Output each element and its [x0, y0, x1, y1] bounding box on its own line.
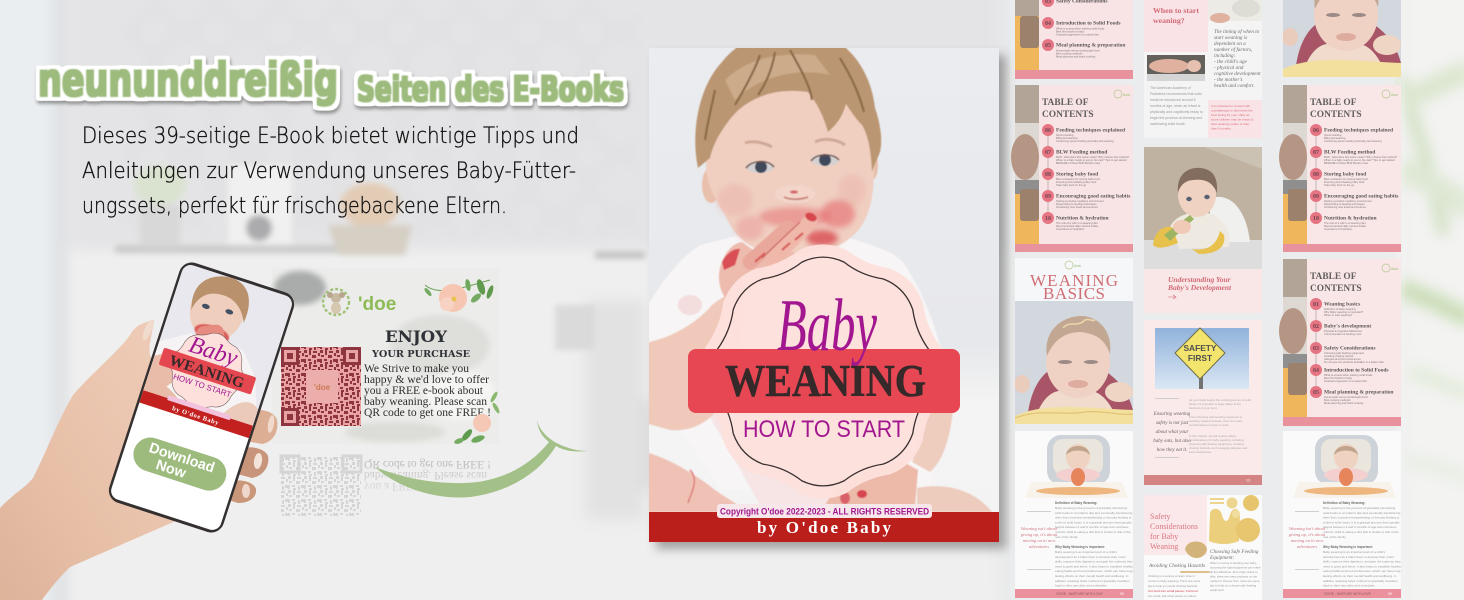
- page: spaghetti baby feeding notes: moving on to new: [1023, 538, 1056, 543]
- page: table of contents 01-05: doe: [1391, 266, 1399, 271]
- page: when to start weaning: The American Academy of: [1150, 86, 1191, 90]
- page: when to start weaning: a pediatrician to determine the: [1211, 108, 1253, 112]
- page: baby feeding notes right column: them from exclusive breastfeeding or formula feeding to: [1323, 516, 1400, 520]
- page: table of contents 06-10 right column: Encouraging good eating habits: [1324, 194, 1398, 200]
- page: baby feeding notes right column: Baby weaning is the process of gradually introducing: [1323, 506, 1396, 510]
- phone cover badge: Baby: [186, 332, 241, 372]
- page: safety considerations: Safety: [1150, 512, 1170, 521]
- page: safety first: choking hazards, and managing allergies and: [1189, 446, 1248, 450]
- page: spaghetti baby feeding notes: a diet of solid foods. It is a gradual process that typically: [1055, 520, 1132, 524]
- page: table of contents 06-10 right column: Best containers for storing baby food: [1324, 177, 1368, 181]
- page: understanding baby's development: Baby's Development: [1167, 283, 1232, 292]
- floral decoration top: [423, 278, 495, 312]
- page: table of contents 06-10 right column: Take baby food on the go: [1324, 183, 1355, 187]
- page: table of contents 01-05: Do not give the products forbidden in a baby's diet: [1324, 360, 1384, 364]
- page: table of contents 06-10: Nutrition & hydration: [1056, 216, 1109, 222]
- page: table of contents 06-10: 09: [1045, 194, 1051, 200]
- page: table of contents 01-05: 05: [1313, 390, 1319, 396]
- page: spaghetti baby feeding notes: begins between 4 and 6 months of age and continues: [1055, 525, 1129, 529]
- page: table of contents 06-10 right column: Feeding techniques explained: [1324, 128, 1393, 134]
- page: table of contents 06-10 right column: Importance of hydration: [1324, 227, 1353, 231]
- card text: happy & we'd love to offer: [364, 372, 489, 386]
- page: spaghetti baby feeding notes: adventures: [1029, 544, 1049, 549]
- red footer band: [649, 512, 999, 542]
- page: when to start weaning: Pediatrics recommends that solid: [1150, 92, 1202, 96]
- thumbnail pages: [1011, 0, 1401, 600]
- card text: you a FREE e-book about: [364, 383, 484, 397]
- page: table of contents 06-10 right column: BLW Feeding method: [1324, 150, 1375, 156]
- page: table of contents 06-10 right column: [1279, 85, 1401, 252]
- floral decoration bottom: [453, 391, 501, 445]
- page: safety considerations: Considerations: [1150, 522, 1198, 531]
- title: neununddreißig Seiten des E-Books: neununddreißig: [38, 53, 338, 107]
- page: safety considerations: tips to help you choose safe feeding: [1210, 584, 1257, 588]
- page: spaghetti baby feeding notes: lasting effects on their overall health and wellbeing. In: [1055, 574, 1129, 578]
- page: table of contents 06-10 right column: Responding to feeding techniques: [1324, 202, 1365, 206]
- page: spaghetti baby feeding notes: development as it helps them to develop their motor: [1055, 555, 1126, 559]
- page: table of contents 01-05: Meal planning and batch cooking: [1324, 401, 1364, 405]
- page: table of contents 06-10 right column: 07: [1313, 150, 1319, 156]
- page: safety considerations: Choking is a serious concern when it: [1148, 574, 1195, 578]
- page: table of contents 06-10: Introducing new foods and textures: [1056, 205, 1098, 209]
- page: table of contents 01-05: Allergies and food intolerances: [1324, 357, 1361, 361]
- page: table of contents 06-10: When is a baby ready to eat on his own? Tips to get started: [1056, 158, 1127, 162]
- reflection of QR card: you a FREE e-book about: [364, 480, 484, 494]
- page: table of contents 01-05: Choosing safe feeding equipment: [1324, 351, 1364, 355]
- page: when to start weaning: - the child's age: [1214, 59, 1248, 65]
- page: safety first: about what your: [1156, 430, 1188, 435]
- page: table of contents 06-10: BLW : what does this name mean? Why choose this method?: [1056, 155, 1130, 159]
- page: safety first: foods, it's important to keep safety at the: [1189, 402, 1241, 406]
- page: table of contents 06-10: Feeding techniques explained: [1056, 128, 1125, 134]
- page: spaghetti baby feeding notes: skills, improve their digestion, and gain the nutrients they: [1055, 560, 1133, 564]
- page: weaning basics: WEANING: [1030, 271, 1118, 290]
- page: when to start weaning: foods be introduced around 6: [1150, 98, 1196, 102]
- page: table of contents 01-05: 04: [1313, 368, 1319, 374]
- page: table of contents 06-10 right column: Nutrition & hydration: [1324, 216, 1377, 222]
- page: when to start weaning: health and comfort.: [1214, 82, 1255, 89]
- page: table of contents 01-05: Communication & feeding cues: [1324, 332, 1362, 336]
- copyright pill: [717, 504, 932, 518]
- title: neununddreißig Seiten des E-Books: [38, 53, 624, 110]
- page: table of contents 01-05: Introduction to Solid Foods: [1324, 368, 1389, 374]
- page: table of contents 01-05: [1279, 259, 1401, 426]
- page: when to start weaning: physically and cognitively ready to: [1150, 110, 1203, 114]
- e-book cover: [645, 42, 999, 542]
- words: HOW TO START: HOW TO START: [743, 416, 905, 443]
- page: understanding baby's development: [1144, 147, 1262, 313]
- description text block: ungssets, perfekt für frischgebackene Eltern.: [82, 194, 507, 219]
- page: table of contents 01-05: 03: [1313, 346, 1319, 352]
- page: when to start weaning: begin the process of chewing and: [1150, 116, 1202, 120]
- page: table of contents 06-10: Storing baby food: [1056, 172, 1098, 178]
- O'doe logo: 'doe: [358, 294, 396, 315]
- page: table of contents 06-10: Take baby food on the go: [1056, 183, 1087, 187]
- QR code: [281, 347, 361, 426]
- page: safety considerations: Weaning: [1150, 542, 1178, 551]
- nose: [784, 194, 809, 200]
- page: table of contents 06-10: Combining spoon feeding and baby-led weaning: [1056, 139, 1114, 143]
- page: baby feeding notes right column: skills, improve their digestion, and gain the nutrients they: [1323, 560, 1401, 564]
- page: baby feeding notes right column: lasting effects on their overall health and wellbeing. In: [1323, 574, 1397, 578]
- script word: Baby: Baby: [777, 285, 877, 367]
- page: table of contents 01-05: 02: [1313, 324, 1319, 330]
- page: table of contents 06-10: doe: [1123, 92, 1131, 97]
- page: table of contents 01-05: Physical & Cognitive Milestones: [1324, 329, 1363, 333]
- page: safety first: baby eats, but also: [1153, 439, 1191, 444]
- page: contents 03-05 cropped: Best first foods for baby: [1056, 30, 1085, 34]
- page: when to start weaning: weaning?: [1153, 16, 1185, 25]
- page: when to start weaning: start weaning earlier or later: [1211, 122, 1249, 126]
- page: table of contents 06-10 right column: The role of a milk in a weaning diet: [1324, 221, 1366, 225]
- page: safety first: SAFETY: [1183, 343, 1217, 353]
- page: safety considerations: Cut food into small pieces: Cut food: [1148, 589, 1198, 593]
- page: when to start weaning: some children may be ready to: [1211, 118, 1254, 122]
- page: baby feeding notes right column: Weaning isn't about: [1289, 526, 1326, 531]
- page: spaghetti baby feeding notes: Baby weaning is the process of gradually introducing: [1055, 506, 1128, 510]
- page: table of contents 06-10: Importance of hydration: [1056, 227, 1085, 231]
- page: safety considerations: equipment:: [1210, 588, 1224, 592]
- page: table of contents 06-10: Spoon feeding: [1056, 133, 1074, 137]
- page: baby feeding notes right column: [1283, 431, 1401, 598]
- red title bar: [688, 349, 960, 413]
- page: spaghetti baby feeding notes: need to grow and thrive. It also helps to establish healthy: [1055, 564, 1133, 568]
- page: when to start weaning: - physical and: [1214, 65, 1244, 71]
- page: when to start weaning: number of factors,: [1214, 46, 1252, 53]
- page: weaning basics: BASICS: [1043, 284, 1105, 303]
- phone cover red band: by O'doe Baby: [171, 405, 220, 427]
- page: spaghetti baby feeding notes: Why Baby Weaning is Important:: [1055, 545, 1105, 549]
- page: safety first: 13: [1246, 478, 1250, 482]
- page: table of contents 01-05: Gradual progression to a varied diet: [1324, 379, 1367, 383]
- page: contents 03-05 cropped: [1015, 0, 1133, 79]
- page: baby feeding notes right column: until the child is eating a diet that is similar to that of the: [1323, 530, 1399, 534]
- page: when to start weaning: - the mother's: [1214, 77, 1242, 83]
- phone cover red band: [139, 387, 254, 438]
- page: safety first: food intolerances.: [1189, 450, 1212, 454]
- page: safety considerations: tips to help you avoid choking hazards:: [1148, 584, 1198, 588]
- page: table of contents 01-05: Baby's development: [1324, 324, 1371, 330]
- page photo: baby with spaghetti: [1014, 301, 1133, 424]
- phone cover badge: WEANING: [167, 353, 246, 392]
- page: baby feeding notes right column: Definition of Baby Weaning:: [1323, 501, 1365, 505]
- page: when to start weaning: [1144, 0, 1262, 138]
- page: baby feeding notes right column: back to their own diets and schedules.: [1323, 584, 1376, 588]
- card text: YOUR PURCHASE: [371, 350, 470, 360]
- page: table of contents 06-10: Responding to feeding techniques: [1056, 202, 1097, 206]
- card text: [364, 327, 491, 419]
- page: safety first: how they eat it.: [1157, 448, 1187, 453]
- page: safety first: considerations to keep in mind.: [1189, 423, 1229, 427]
- page: spaghetti baby feeding notes: solid foods to an infant's diet and eventually transitioning: [1055, 511, 1133, 515]
- page: table of contents 06-10 right column: Spoon feeding: [1324, 133, 1342, 137]
- white haze over thumbnails: [1010, 0, 1405, 600]
- page: baby feeding notes right column: moving on to new: [1291, 538, 1324, 543]
- page: safety considerations: choosing the right equipment can make: [1210, 566, 1261, 570]
- hand holding phone: [0, 318, 277, 600]
- card text: QR code to get one FREE !: [364, 405, 491, 419]
- badge inner wavy line: [712, 257, 934, 486]
- page: table of contents 01-05: 01: [1313, 302, 1319, 308]
- reflection of QR card: QR code to get one FREE !: [364, 458, 491, 472]
- QR code: 'doe: [314, 383, 331, 392]
- page: table of contents 01-05: Safety Considerations: [1324, 346, 1376, 352]
- page: contents 03-05 cropped: 04: [1045, 21, 1051, 27]
- page: table of contents 06-10 right column: Combining spoon feeding and baby-led weaning: [1324, 139, 1382, 143]
- page: table of contents 06-10: 08: [1045, 172, 1051, 178]
- page: safety considerations: Choosing Safe Feeding: [1210, 548, 1259, 555]
- page: safety considerations: market to choose from. Here are some: [1210, 579, 1260, 583]
- page: contents 03-05 cropped: Gradual progression to a varied diet: [1056, 32, 1099, 36]
- page: baby feeding notes right column: giving up, it's about: [1289, 532, 1326, 538]
- page: baby feeding notes right column: addition, weaning helps mothers to gradually transition: [1323, 579, 1398, 583]
- page: table of contents 06-10: [1011, 85, 1133, 252]
- page: table of contents 01-05: What to expect when starting solid foods: [1324, 373, 1373, 377]
- phone cover badge: [149, 319, 266, 423]
- left arm: [649, 296, 726, 431]
- page: safety first: FIRST: [1188, 353, 1213, 363]
- page: weaning basics: doe: [1074, 263, 1082, 268]
- page: safety considerations: comes to baby weaning. There are some: [1148, 579, 1201, 583]
- page: baby feeding notes right column: Why Baby Weaning is Important:: [1323, 545, 1373, 549]
- page: spaghetti baby feeding notes: [1015, 431, 1133, 598]
- page: spaghetti baby feeding notes: until the child is eating a diet that is similar to that of the: [1055, 530, 1131, 534]
- phone cover badge: HOW TO START: [172, 372, 232, 399]
- card text: baby weaning. Please scan: [364, 394, 487, 408]
- page: table of contents 01-05: Homemade versus storebought food: [1324, 395, 1368, 399]
- card text: We Strive to make you: [364, 361, 469, 375]
- page: contents 03-05 cropped: Best cooking methods: [1056, 52, 1083, 56]
- page: spaghetti baby feeding notes: Weaning isn't about: [1021, 526, 1058, 531]
- cover photo: baby: [645, 42, 992, 512]
- page: table of contents 06-10 right column: 09: [1313, 194, 1319, 200]
- page: when to start weaning: It is important to consult with: [1211, 104, 1250, 108]
- page: table of contents 06-10 right column: 06: [1313, 128, 1319, 134]
- hand with fingers: [719, 211, 818, 302]
- page: safety considerations: into small, bite-sized pieces to reduce: [1148, 594, 1197, 598]
- page: table of contents 06-10: Freezing and reheating baby food: [1056, 180, 1097, 184]
- page: when to start weaning: months of age, when an infant is: [1150, 104, 1201, 108]
- author line: by O'doe Baby: [757, 518, 892, 537]
- page: table of contents 01-05: Avoiding choking hazard: [1324, 354, 1354, 358]
- page: when to start weaning: swallowing solid foods.: [1150, 122, 1186, 126]
- page: safety considerations: When it comes to feeding your baby,: [1210, 561, 1257, 565]
- page: safety considerations: for Baby: [1150, 532, 1178, 541]
- page: safety considerations: all the difference. From high chairs to: [1210, 570, 1258, 574]
- page: weaning basics: [1015, 258, 1133, 424]
- page: spaghetti baby feeding notes: 09: [1120, 592, 1124, 596]
- copyright pill: Copyright O'doe 2022-2023 - ALL RIGHTS RESERVED: [720, 506, 929, 516]
- page: when to start weaning: than 6 months.: [1211, 126, 1232, 130]
- eyes: [746, 154, 839, 173]
- scalloped badge: [700, 244, 946, 499]
- page: safety first: [1144, 320, 1262, 485]
- reflection of QR card: baby weaning. Please scan: [364, 469, 487, 483]
- page: baby feeding notes right column: Baby weaning is an important part of a child's: [1323, 550, 1386, 554]
- page: spaghetti baby feeding notes: Definition of Baby Weaning:: [1055, 501, 1097, 505]
- page: table of contents 01-05: Definition of baby weaning: [1324, 307, 1356, 311]
- page: table of contents 06-10 right column: BLW : what does this name mean? Why choose this method?: [1324, 155, 1398, 159]
- page: when to start weaning: The timing of when to: [1214, 28, 1260, 35]
- page: baby feeding notes right column: need to grow and thrive. It also helps to establish healthy: [1323, 564, 1401, 568]
- page: table of contents 06-10: CONTENTS: [1042, 110, 1094, 120]
- page: when to start weaning: including:: [1214, 53, 1236, 59]
- page: table of contents 01-05: CONTENTS: [1310, 284, 1362, 294]
- page: table of contents 06-10: Recommended daily nutrient intake: [1056, 224, 1099, 228]
- page: table of contents 01-05: Best first foods for baby: [1324, 376, 1353, 380]
- page: safety first: choosing safe feeding equipment, avoiding: [1189, 442, 1244, 446]
- download button: Download: [147, 440, 217, 476]
- page: table of contents 06-10: BEWARE of these BLW Burden rules: [1056, 161, 1101, 165]
- page: safety considerations: Avoiding Choking Hazards: [1148, 563, 1205, 569]
- reflection of QR card: [281, 456, 491, 516]
- page: safety first: avoiding choking hazards, there are many: [1189, 419, 1243, 423]
- right arm: [912, 413, 953, 472]
- page: spaghetti baby feeding notes: rest of the family.: [1055, 535, 1078, 539]
- page: baby feeding notes right column: solid foods to an infant's diet and eventually transitioning: [1323, 511, 1401, 515]
- page: safety considerations: bibs, there are many products on the: [1210, 574, 1257, 578]
- page: when to start weaning: dependent on a: [1214, 41, 1246, 47]
- page: table of contents 06-10 right column: 08: [1313, 172, 1319, 178]
- page: table of contents 06-10 right column: Baby-led weaning: [1324, 136, 1346, 140]
- page: table of contents 06-10: 10: [1045, 216, 1051, 222]
- green curved arrow: [375, 420, 588, 498]
- red food smears: [759, 207, 831, 227]
- page: table of contents 01-05: Best cooking methods: [1324, 398, 1351, 402]
- page: baby feeding notes right column: a diet of solid foods. It is a gradual process that typically: [1323, 520, 1400, 524]
- page: table of contents 01-05: Why Baby weaning is important?: [1324, 310, 1364, 314]
- O'doe logo: [323, 289, 396, 315]
- page: table of contents 06-10: Baby-led weaning: [1056, 136, 1078, 140]
- page: baby feeding notes right column: rest of the family.: [1323, 535, 1346, 539]
- page: table of contents 06-10 right column: CONTENTS: [1310, 110, 1362, 120]
- page: spaghetti baby feeding notes: addition, weaning helps mothers to gradually transition: [1055, 579, 1130, 583]
- page: table of contents 01-05: TABLE OF: [1310, 272, 1357, 282]
- page: contents 03-05 cropped: 05: [1045, 43, 1051, 49]
- title: neununddreißig Seiten des E-Books: Seiten des E-Books: [357, 70, 624, 110]
- ear and face: [702, 170, 716, 204]
- page: spaghetti baby feeding notes: O'DOE - NURTURE WITH LOVE: [1056, 592, 1103, 596]
- page: table of contents 06-10 right column: Freezing and reheating baby food: [1324, 180, 1365, 184]
- page: baby feeding notes right column: O'DOE - NURTURE WITH LOVE: [1324, 592, 1371, 596]
- page: baby with spaghetti cropped: [1282, 0, 1401, 77]
- page: safety first: Ensuring weaning: [1153, 412, 1191, 417]
- page: baby feeding notes right column: 09: [1388, 592, 1392, 596]
- page: table of contents 06-10: Best containers for storing baby food: [1056, 177, 1100, 181]
- page: safety first: considerations for baby weaning, including: [1189, 438, 1244, 442]
- page: table of contents 06-10: The role of a milk in a weaning diet: [1056, 221, 1098, 225]
- page: contents 03-05 cropped: Homemade versus storebought food: [1056, 48, 1100, 52]
- page: safety first: forefront of your mind.: [1189, 406, 1217, 410]
- brows: [745, 139, 845, 147]
- page: table of contents 06-10 right column: When is a baby ready to eat on his own? Tips to get started: [1324, 158, 1395, 162]
- page: when to start weaning: start weaning is: [1214, 35, 1247, 41]
- page: table of contents 01-05: Weaning basics: [1324, 302, 1360, 308]
- page: spaghetti baby feeding notes: giving up, it's about: [1021, 532, 1058, 538]
- page: safety first: safety is not just: [1156, 421, 1189, 426]
- download button: Now: [154, 457, 188, 482]
- page: table of contents 06-10 right column: TABLE OF: [1310, 98, 1357, 108]
- page: spaghetti baby feeding notes: Baby weaning is an important part of a child's: [1055, 550, 1118, 554]
- page: safety considerations: Equipment:: [1209, 555, 1234, 561]
- yellow feeding set: [1209, 495, 1260, 544]
- description text block: Dieses 39-seitige E-Book bietet wichtige Tipps und: [82, 124, 579, 149]
- page: table of contents 06-10 right column: Setting a positive mealtime environment: [1324, 199, 1372, 203]
- page: when to start weaning: When to start: [1153, 6, 1199, 15]
- page: contents 03-05 cropped: Introduction to Solid Foods: [1056, 20, 1121, 26]
- legs: [649, 452, 738, 512]
- hair: [695, 42, 881, 172]
- page: table of contents 06-10: BLW Feeding method: [1056, 150, 1107, 156]
- page: table of contents 01-05: When to start weaning?: [1324, 313, 1353, 317]
- page: spaghetti baby feeding notes: eating habits and food preferences, which can have long-: [1055, 569, 1133, 573]
- page: spaghetti baby feeding notes: them from exclusive breastfeeding or formula feeding to: [1055, 516, 1132, 520]
- phone screen: e-book cover: [142, 263, 295, 429]
- description text block: Anleitungen zur Verwendung unseres Baby-Fütter-: [82, 159, 576, 184]
- page: contents 03-05 cropped: Meal planning and batch cooking: [1056, 54, 1096, 58]
- page: spaghetti baby feeding notes: back to their own diets and schedules.: [1055, 584, 1108, 588]
- page: table of contents 06-10: TABLE OF: [1042, 98, 1089, 108]
- page: table of contents 06-10 right column: Introducing new foods and textures: [1324, 205, 1366, 209]
- page: table of contents 06-10: 06: [1045, 128, 1051, 134]
- page: table of contents 01-05: Meal planning & preparation: [1324, 390, 1393, 396]
- page: table of contents 06-10 right column: Storing baby food: [1324, 172, 1366, 178]
- page: table of contents 06-10 right column: doe: [1391, 92, 1399, 97]
- page: baby feeding notes right column: eating habits and food preferences, which can have long-: [1323, 569, 1401, 573]
- page: contents 03-05 cropped: Meal planning & preparation: [1056, 42, 1125, 48]
- page: baby feeding notes right column: begins between 4 and 6 months of age and continues: [1323, 525, 1397, 529]
- fingers: [222, 410, 277, 503]
- smartphone: [106, 259, 297, 536]
- description text block: [82, 124, 579, 219]
- page: table of contents 06-10 right column: 10: [1313, 216, 1319, 222]
- page: table of contents 06-10: Setting a positive mealtime environment: [1056, 199, 1104, 203]
- page: baby feeding notes right column: development as it helps them to develop their motor: [1323, 555, 1394, 559]
- page: understanding baby's development: Understanding Your: [1168, 275, 1231, 284]
- gift card with QR code: [272, 268, 501, 445]
- page: safety first: As your baby begins the exciting journey of solid: [1189, 398, 1251, 402]
- page: safety considerations: [1144, 495, 1262, 600]
- page: table of contents 06-10 right column: BEWARE of these BLW Burden rules: [1324, 161, 1369, 165]
- page: when to start weaning: cognitive development: [1214, 71, 1261, 77]
- e-book cover shadow: [656, 55, 1006, 549]
- page: table of contents 06-10 right column: Recommended daily nutrient intake: [1324, 224, 1367, 228]
- page: safety first: From choosing safe feeding equipment to: [1189, 415, 1243, 419]
- page: when to start weaning: best timing for your child, as: [1211, 113, 1250, 117]
- word: WEANING: WEANING: [725, 356, 926, 406]
- page: table of contents 06-10: 07: [1045, 150, 1051, 156]
- card text: ENJOY: [385, 327, 448, 346]
- page: table of contents 06-10: Encouraging good eating habits: [1056, 194, 1130, 200]
- download button: [129, 433, 231, 495]
- page: baby feeding notes right column: adventures: [1297, 544, 1317, 549]
- page: contents 03-05 cropped: What to expect when starting solid foods: [1056, 26, 1105, 30]
- page: safety first: In this chapter, we will explore safety: [1189, 434, 1236, 438]
